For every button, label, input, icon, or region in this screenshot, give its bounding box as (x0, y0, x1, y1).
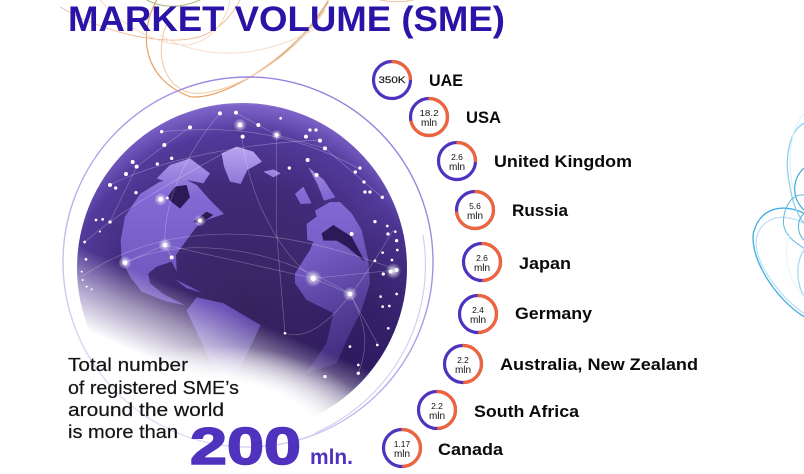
continents (121, 147, 370, 387)
country: United Kingdom: mln (449, 162, 465, 173)
outer ring (63, 77, 433, 447)
country: Canada: Canada (438, 441, 504, 459)
globe with rings (50, 77, 433, 474)
title: MARKET VOLUME (SME) (68, 0, 505, 39)
country: Australia, New Zealand: 2.2 (457, 355, 469, 365)
node glows (118, 118, 401, 301)
country: Russia: 5.6 (469, 201, 481, 211)
country: Germany: 2.4 (472, 305, 484, 315)
country: Germany: Germany (515, 305, 593, 323)
country: South Africa (418, 392, 580, 428)
country: Australia, New Zealand: mln (455, 365, 471, 376)
country: UAE (374, 62, 463, 98)
country: Canada (384, 430, 504, 466)
country: USA: USA (466, 109, 501, 127)
inner ring arc (315, 235, 425, 433)
white blob under text (50, 345, 380, 474)
country: UAE: UAE (429, 72, 463, 90)
country: Australia, New Zealand: Australia, New Zealand (500, 356, 698, 374)
sphere shading (77, 103, 407, 433)
country: United Kingdom: United Kingdom (494, 153, 632, 171)
big number (190, 418, 353, 474)
country: Japan: Japan (519, 255, 571, 273)
total text block: Total number (68, 355, 188, 375)
total text block: of registered SME’s (68, 378, 239, 398)
big number: mln. (310, 446, 353, 469)
network lines (82, 113, 397, 373)
country: USA: 18.2 (420, 108, 439, 118)
network nodes (81, 111, 399, 378)
inland seas (168, 185, 365, 262)
country: Russia (456, 192, 569, 228)
country: UAE: 350K (378, 75, 406, 85)
country: Canada: mln (394, 449, 410, 460)
country: South Africa: mln (429, 411, 445, 422)
country: South Africa: 2.2 (431, 401, 443, 411)
country: Russia: mln (467, 211, 483, 222)
decorative orange swirl lines (60, 0, 413, 97)
total text block (68, 355, 239, 442)
country: USA: mln (421, 118, 437, 129)
total text block: is more than (68, 422, 178, 442)
decorative blue swirl lines (753, 113, 804, 317)
total text block: around the world (68, 400, 224, 420)
country: United Kingdom (438, 142, 632, 180)
country: Canada: 1.17 (394, 439, 411, 449)
country: Australia, New Zealand (444, 346, 698, 382)
country: South Africa: South Africa (474, 403, 580, 421)
country: Japan: mln (474, 263, 490, 274)
country: Germany: mln (470, 315, 486, 326)
country: Japan (464, 244, 571, 280)
country: Russia: Russia (512, 202, 569, 220)
country: USA (410, 98, 501, 136)
country: Germany (460, 296, 593, 332)
country: Japan: 2.6 (476, 253, 488, 263)
white fade over globe (75, 101, 409, 435)
globe sphere (77, 103, 407, 433)
country: United Kingdom: 2.6 (451, 152, 463, 162)
